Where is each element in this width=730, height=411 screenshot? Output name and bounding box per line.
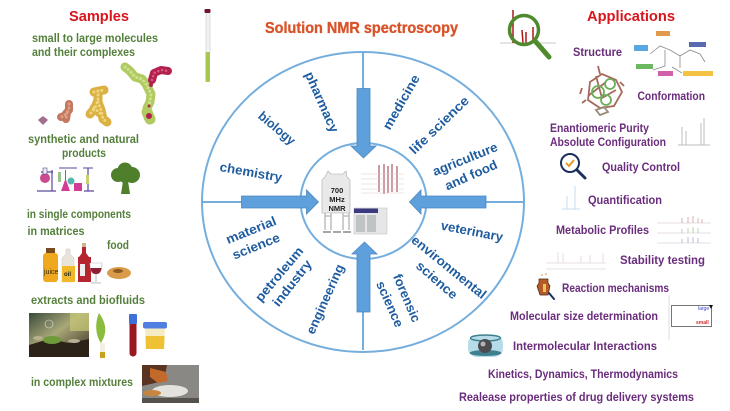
arrow: top (351, 88, 376, 158)
text: structure: Structure (573, 47, 622, 59)
diagram: application fields wheel (202, 52, 524, 352)
text: synthetic and natural products: products (62, 148, 106, 160)
arrow: right (410, 190, 486, 214)
heading: samples: Samples (69, 8, 129, 25)
icon: leaf with extract vial (96, 313, 105, 358)
icon: NMR console (354, 208, 387, 234)
label: life science: life science (406, 93, 472, 157)
heading: applications: Applications (587, 8, 675, 25)
icon: 700 MHz NMR magnet: MHz (329, 195, 345, 204)
text: extracts and biofluids: extracts and biofluids (31, 295, 145, 307)
icon: magnifier over spectrum (500, 10, 556, 57)
icon: food and drink: juice (43, 269, 59, 276)
label: material: material (224, 213, 278, 247)
icon: tree (111, 162, 140, 194)
text: quality control: Quality Control (602, 162, 680, 174)
icon: 700 MHz NMR magnet (322, 171, 351, 232)
text: intermolecular interactions: Intermolecular Interactions (513, 341, 657, 353)
text: food: food (107, 240, 129, 252)
icon: food and drink (43, 243, 131, 283)
text: in matrices: in matrices (28, 226, 84, 238)
icon: urine sample cup (143, 322, 167, 349)
image: seedling photograph (29, 313, 89, 357)
label: and food: and food (442, 157, 500, 193)
label: chemistry: chemistry (219, 159, 284, 185)
label: pharmacy: pharmacy (302, 69, 342, 136)
label: environmental science: science (413, 258, 461, 302)
text: reaction mechanisms: Reaction mechanisms (562, 283, 669, 295)
text: metabolic profiles: Metabolic Profiles (556, 225, 649, 237)
title: Solution NMR spectroscopy (265, 20, 458, 37)
label: biology: biology (255, 108, 299, 148)
chart: 2D NMR spectrum (361, 164, 404, 194)
chart: molecular size plot (669, 295, 713, 340)
diagram: labelled molecular structure (634, 31, 713, 76)
icon: intermolecular interaction sphere (468, 335, 503, 357)
text: conformation: Conformation (638, 91, 705, 103)
icon: blood tube (129, 314, 137, 356)
label: forensic: forensic (390, 272, 424, 324)
text: release properties of drug delivery systems: Realease properties of drug delivery systems (459, 392, 694, 404)
icon: food and drink: oil (64, 272, 71, 278)
label: veterinary: veterinary (440, 218, 505, 245)
text: synthetic and natural products: synthetic and natural (28, 134, 139, 146)
panel: applications (459, 8, 713, 404)
label: forensic science: science (373, 279, 407, 329)
chart: molecular size plot: large (698, 306, 709, 312)
icon: laboratory glassware (37, 168, 94, 191)
icon: reaction flask magnifier (537, 273, 554, 299)
image: pills photograph (142, 365, 199, 403)
text: molecular size determination: Molecular size determination (510, 311, 658, 323)
icon: 700 MHz NMR magnet: 700 (331, 186, 343, 195)
text: small to large molecules: and their complexes (32, 47, 135, 59)
arrow: bottom (352, 242, 377, 312)
text: enantiomeric purity and absolute configuration: Enantiomeric Purity (550, 123, 650, 135)
chart: quantification peaks (562, 186, 580, 209)
label: environmental: environmental (408, 232, 489, 302)
label: medicine: medicine (379, 72, 423, 132)
icon: 700 MHz NMR magnet: NMR (328, 204, 346, 213)
icon: quality control magnifier (561, 154, 585, 178)
icon: molecules of increasing size (39, 67, 168, 124)
text: stability testing: Stability testing (620, 255, 705, 267)
text: in complex mixtures: in complex mixtures (31, 377, 133, 389)
icon: conformation ball and stick model (580, 66, 624, 115)
text: in single components: in single components (27, 209, 131, 221)
chart: molecular size plot: small (696, 320, 709, 326)
arrow: left (242, 190, 318, 214)
label: agriculture: agriculture (430, 139, 500, 179)
chart: stability spectra (546, 252, 606, 269)
text: enantiomeric purity and absolute configuration: Absolute Configuration (550, 137, 666, 149)
panel: samples (27, 8, 199, 403)
label: engineering: engineering (303, 262, 347, 336)
text: kinetics, dynamics, thermodynamics: Kinetics, Dynamics, Thermodynamics (488, 369, 678, 381)
icon: NMR tube (204, 9, 210, 82)
label: industry: industry (269, 256, 315, 309)
label: material science: science (230, 230, 282, 262)
text: quantification: Quantification (588, 195, 662, 207)
chart: metabolic spectra (657, 216, 711, 243)
outer and inner rings (202, 52, 524, 352)
chart: spectrum (678, 118, 710, 145)
label: petroleum: petroleum (252, 244, 306, 305)
text: small to large molecules: small to large molecules (32, 33, 158, 45)
